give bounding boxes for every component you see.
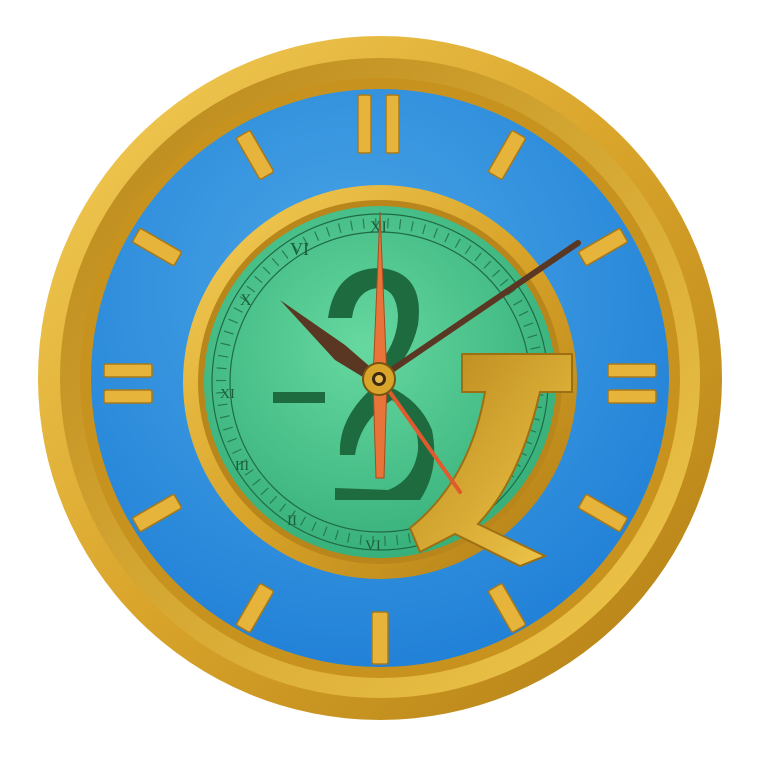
blue dial face [91, 89, 669, 667]
inner green dial: X [240, 292, 252, 309]
gold J symbol [410, 354, 572, 566]
clock hands [280, 212, 578, 492]
inner green dial: XI [370, 219, 387, 236]
inner gold ring [183, 185, 577, 579]
hour markers [104, 95, 656, 664]
inner green dial [204, 206, 556, 558]
inner green dial: XI [220, 387, 235, 402]
inner green dial: VI [290, 239, 309, 259]
currency symbol [273, 268, 434, 500]
inner green dial: III [235, 459, 249, 474]
inner green dial: II [287, 513, 297, 529]
inner green dial: VI [365, 538, 381, 554]
